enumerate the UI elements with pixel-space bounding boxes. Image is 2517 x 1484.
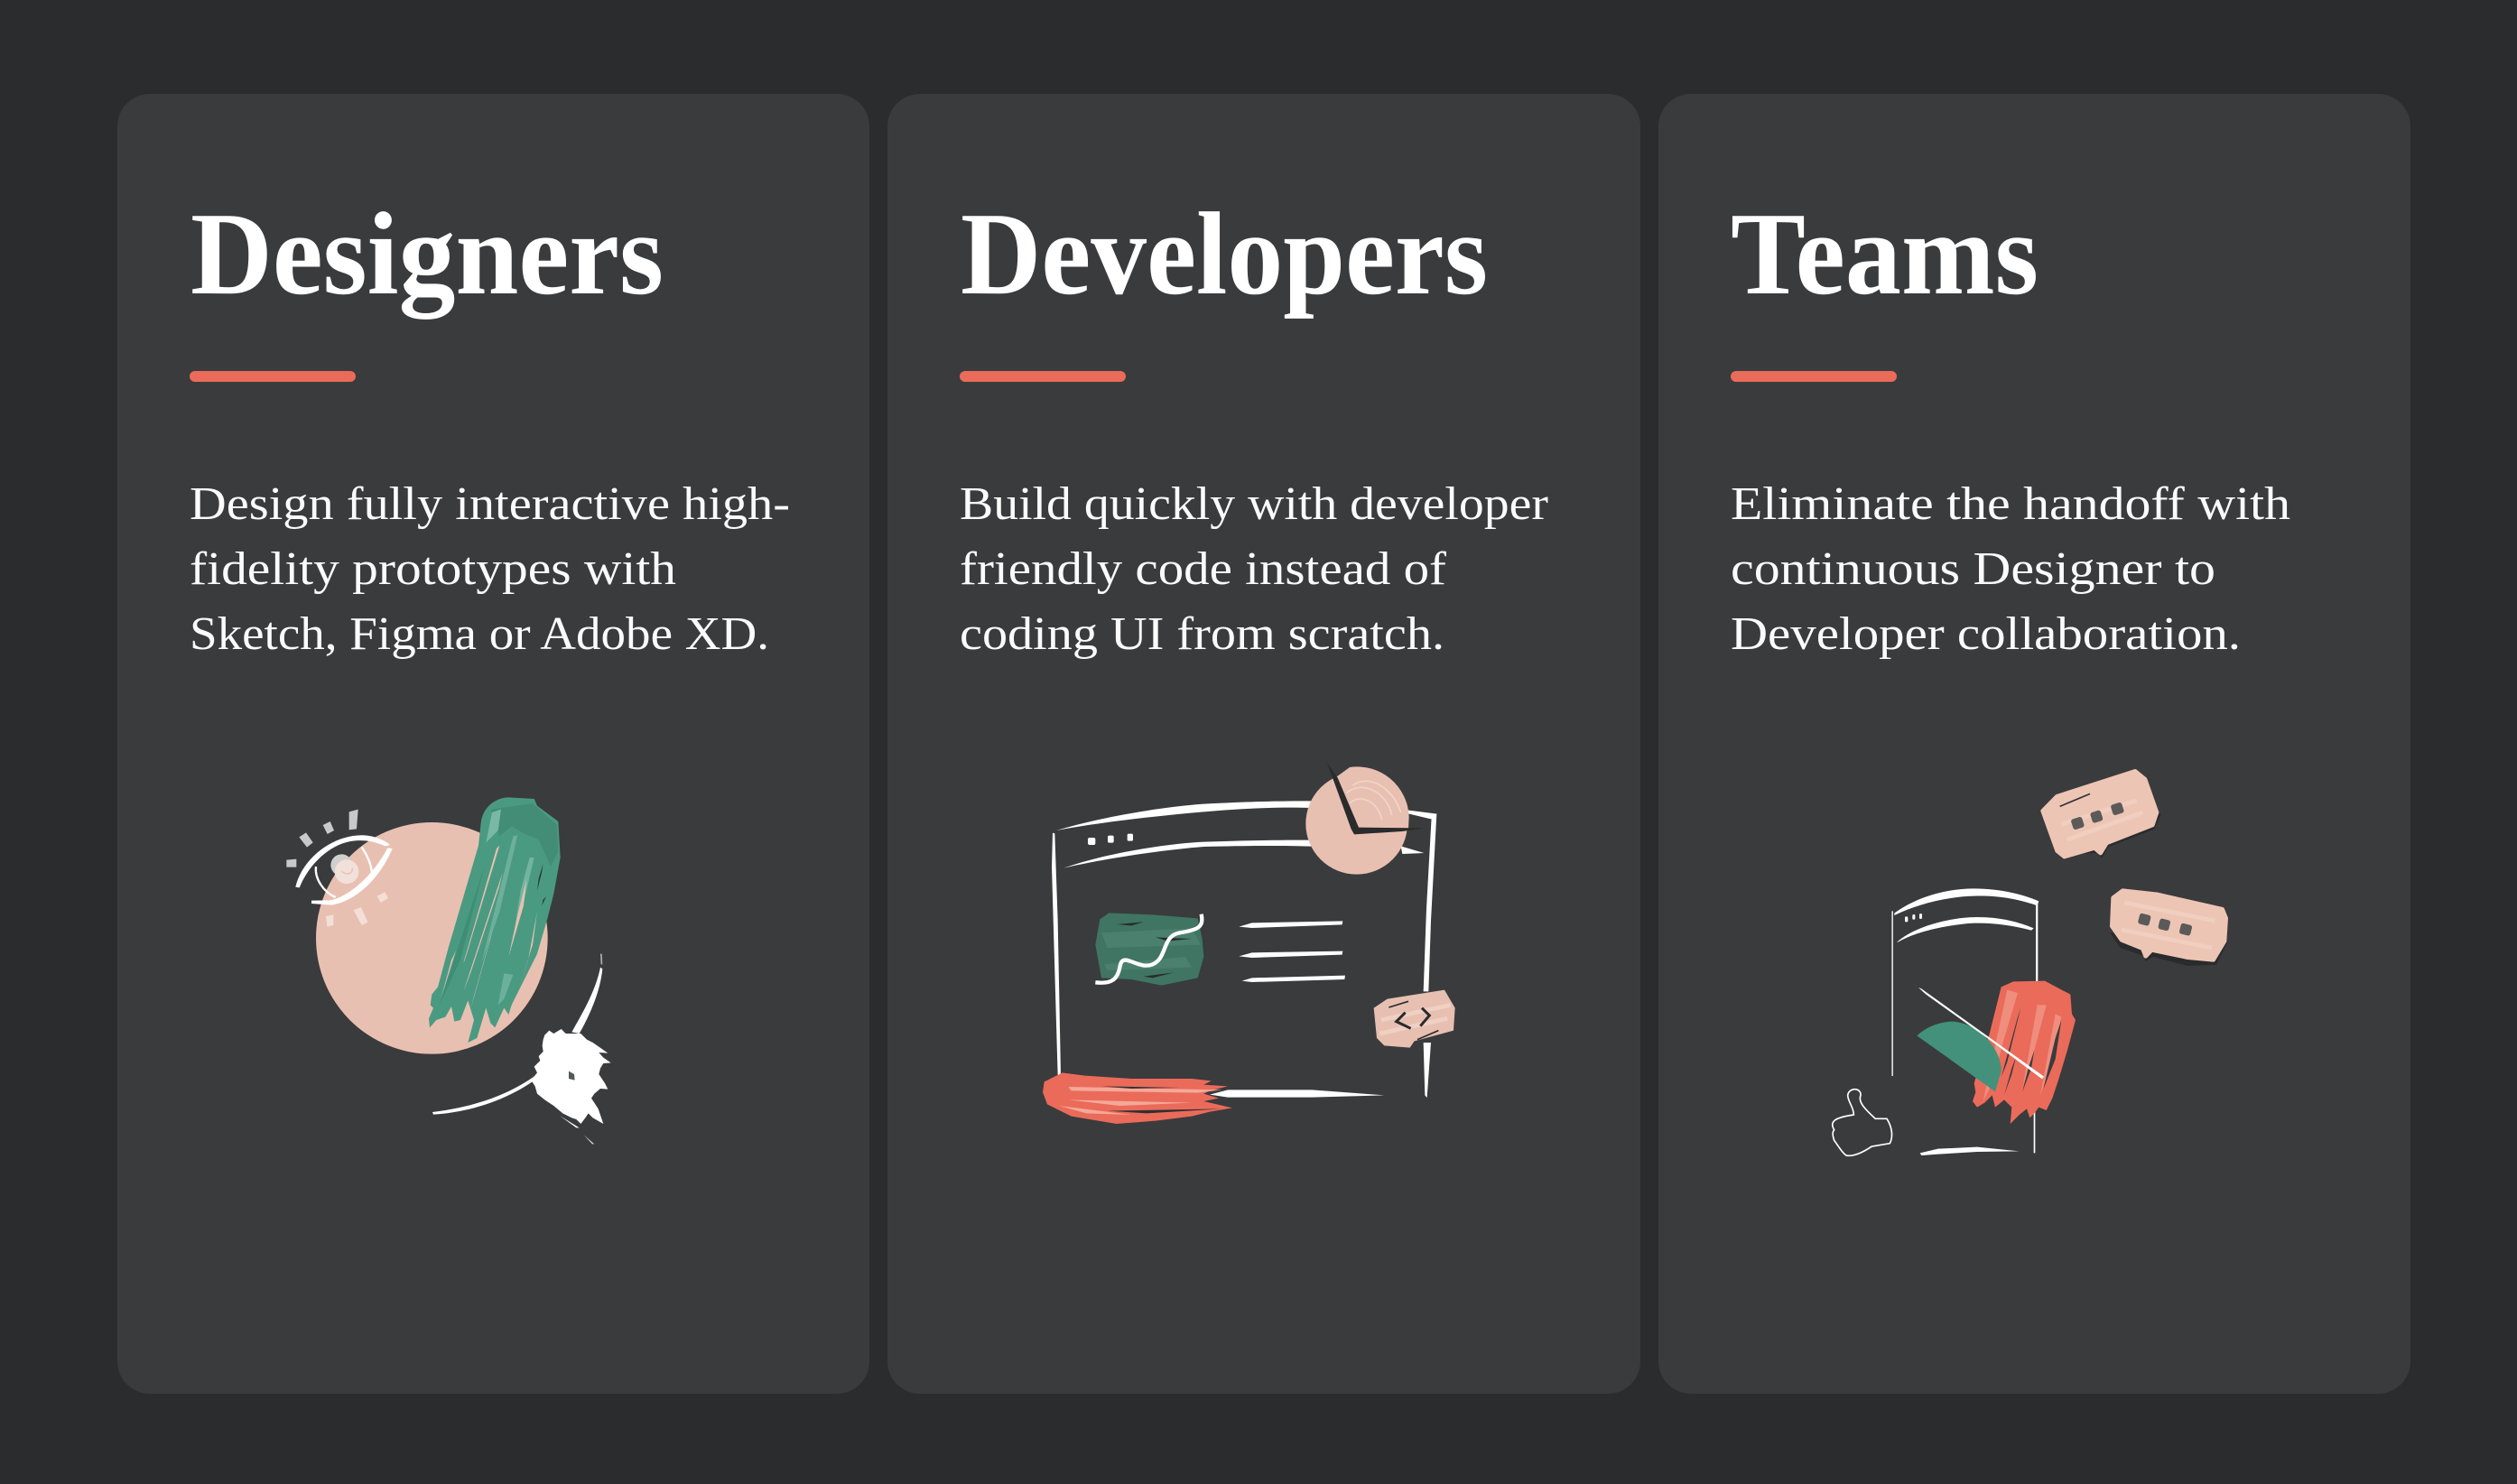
text block: developers description — [960, 478, 1548, 660]
icon: red brush stroke — [1973, 981, 2076, 1124]
icon: code tag badge — [1374, 990, 1455, 1048]
icon: white arc with brush blob — [432, 954, 611, 1144]
panel: teams — [1658, 94, 2410, 1394]
icon: text lines — [1239, 921, 1345, 982]
heading: teams: Teams — [1731, 189, 2039, 320]
icon: eye — [286, 810, 393, 927]
text block: teams description — [1731, 478, 2290, 660]
icon: window frame — [1052, 801, 1437, 1098]
illustration: browser window — [1043, 763, 1455, 1124]
illustration: phone, chat bubbles and thumb — [1833, 771, 2227, 1155]
accent bar: developers — [960, 371, 1126, 382]
peach circle — [316, 822, 548, 1054]
pie chart — [1305, 763, 1424, 875]
heading: developers: Developers — [961, 189, 1488, 320]
text block: teams description: Developer collaboration. — [1731, 608, 2241, 660]
text block: developers description: coding UI from scratch. — [960, 608, 1444, 660]
text block: teams description: Eliminate the handoff with — [1731, 478, 2290, 530]
illustration: eye, circle and brush strokes — [286, 797, 611, 1144]
icon: green chart brush — [1095, 913, 1203, 986]
icon: phone frame — [1891, 888, 2039, 1155]
icon: green brush stroke — [429, 797, 561, 1043]
icon: red brush stroke — [1043, 1072, 1232, 1124]
icon: thumbs up — [1833, 1090, 1892, 1155]
text block: teams description: continuous Designer to — [1731, 543, 2215, 595]
icon: white diagonal line — [1918, 988, 2044, 1079]
text block: designers description: Design fully interactive high- — [190, 478, 790, 530]
text block: designers description: fidelity prototypes with — [190, 543, 676, 595]
text block: developers description: Build quickly with developer — [960, 478, 1548, 530]
text block: designers description — [190, 478, 790, 660]
icon: chat bubble bottom — [2110, 891, 2227, 966]
panel: developers — [887, 94, 1640, 1394]
icon: green half circle — [1917, 1022, 2002, 1091]
text block: developers description: friendly code instead of — [960, 543, 1447, 595]
heading: designers: Designers — [190, 189, 664, 320]
panel: designers — [117, 94, 869, 1394]
accent bar: teams — [1731, 371, 1897, 382]
text block: designers description: Sketch, Figma or Adobe XD. — [190, 608, 769, 660]
icon: chat bubble top — [2043, 771, 2161, 858]
accent bar: designers — [190, 371, 356, 382]
